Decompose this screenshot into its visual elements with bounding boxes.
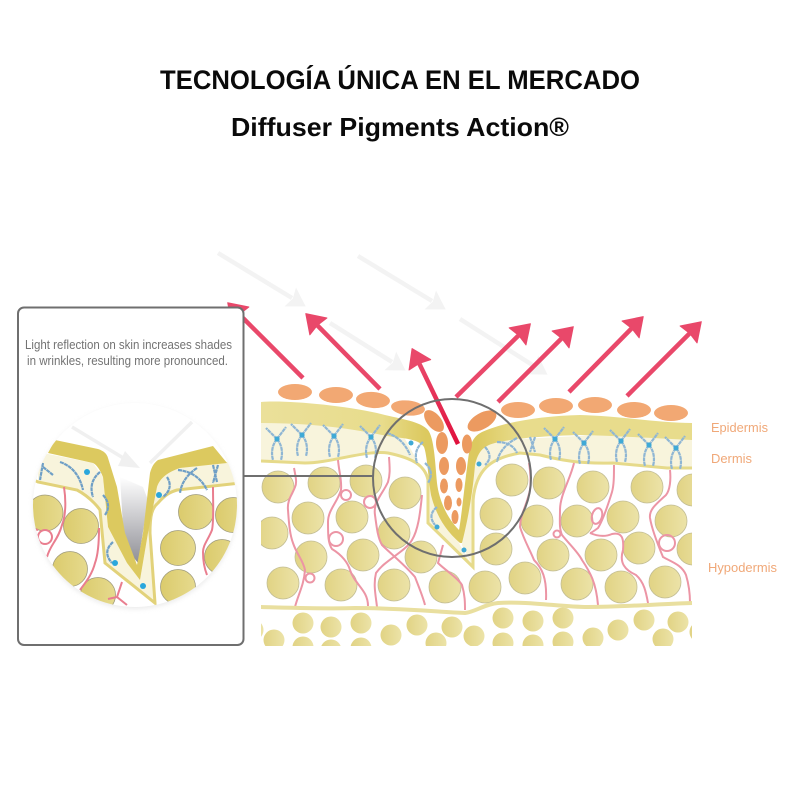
inset dermis bbox=[30, 452, 240, 603]
label: dermis: Dermis bbox=[711, 452, 752, 466]
small fat cells bbox=[261, 608, 692, 646]
inset light arrows bbox=[72, 422, 192, 468]
dermis layer bbox=[261, 420, 693, 567]
labels bbox=[708, 421, 777, 575]
infographic bbox=[17, 65, 776, 646]
incoming light arrows bbox=[218, 253, 534, 366]
panel caption bbox=[25, 338, 232, 368]
connector line bbox=[243, 475, 373, 477]
title: TECNOLOGÍA ÚNICA EN EL MERCADO bbox=[160, 64, 640, 95]
epidermis layer bbox=[261, 402, 693, 543]
inset fibres bbox=[40, 462, 218, 563]
skin cross-section bbox=[261, 402, 692, 646]
large fat cells bbox=[256, 464, 709, 603]
label: epidermis: Epidermis bbox=[711, 421, 768, 435]
panel frame bbox=[18, 308, 244, 645]
inset magnified skin bbox=[33, 404, 237, 607]
label: hypodermis: Hypodermis bbox=[708, 561, 777, 575]
inset fat cells bbox=[33, 494, 237, 604]
panel caption: Light reflection on skin increases shades bbox=[25, 338, 232, 352]
hypodermis boundary bbox=[260, 603, 692, 613]
magnifier circle bbox=[373, 399, 531, 557]
reflected light arrows bbox=[239, 314, 690, 444]
blood vessels bbox=[288, 457, 690, 610]
surface and wrinkle pigments bbox=[278, 384, 688, 524]
panel caption: in wrinkles, resulting more pronounced. bbox=[27, 354, 228, 368]
dermis fibres bbox=[266, 423, 685, 552]
inset pigment dots bbox=[84, 469, 162, 589]
inset epidermis bbox=[48, 440, 227, 580]
subtitle: Diffuser Pigments Action® bbox=[231, 112, 569, 142]
panel: zoomed wrinkle bbox=[18, 308, 250, 645]
inset shadow bbox=[33, 405, 237, 609]
inset wrinkle shadow bbox=[120, 483, 147, 562]
inset vessels bbox=[30, 487, 213, 605]
